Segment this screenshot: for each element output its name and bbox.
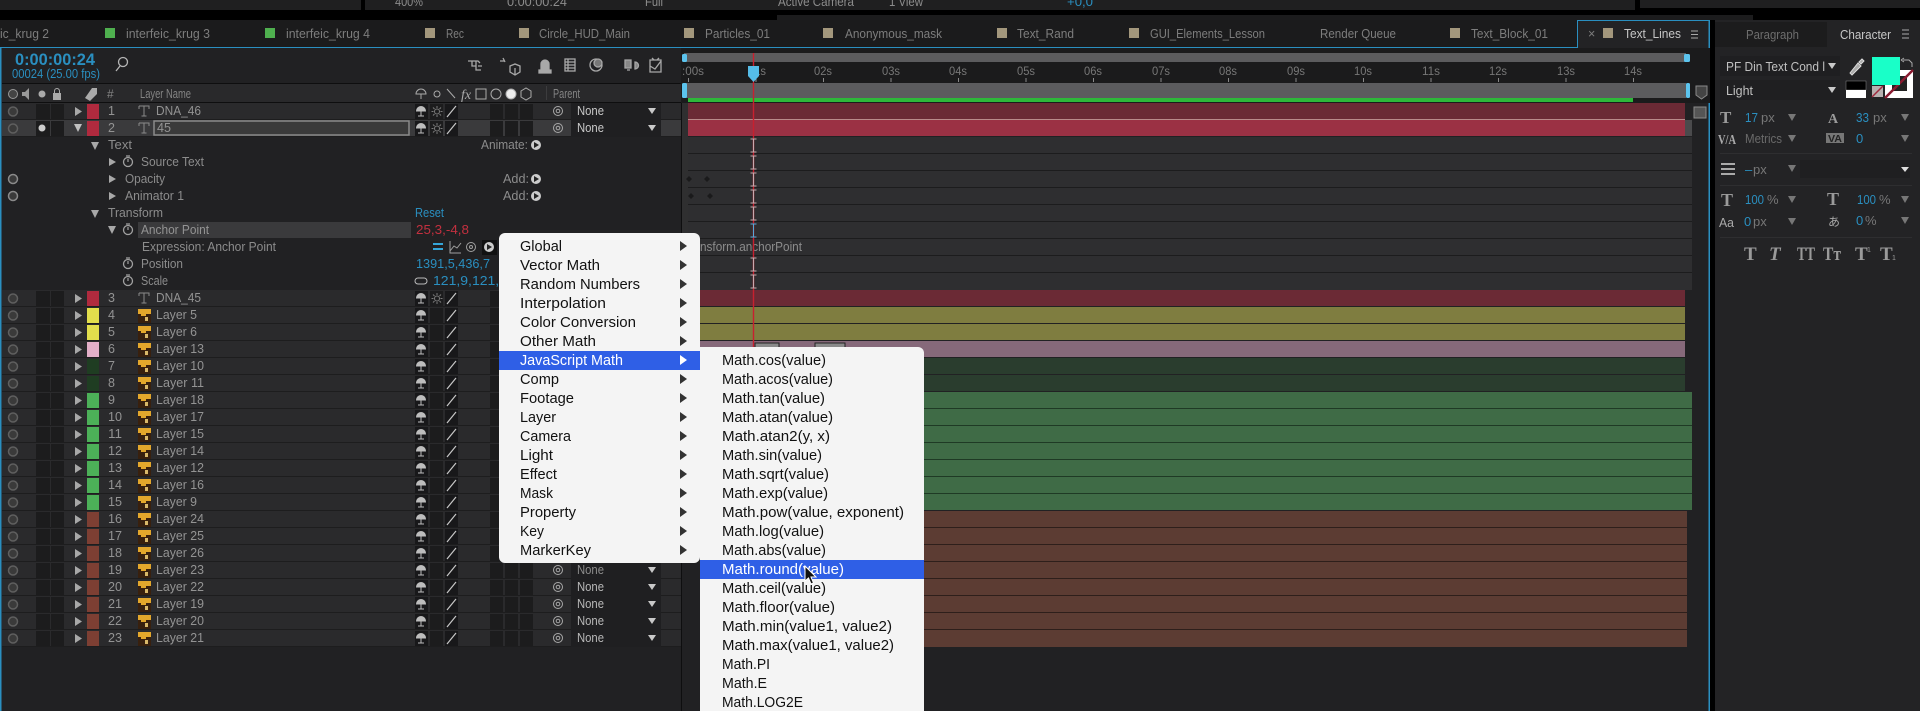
composition tab bar: Anonymous_mask [845, 27, 943, 41]
baseline and tsume row [1719, 213, 1909, 230]
layer row 10: Layer 17 [156, 410, 204, 424]
scale row: T [1721, 190, 1733, 210]
layer row 3: DNA_45: 3 [108, 291, 115, 305]
Text group row: Animate: [481, 138, 528, 152]
scale row: 100 [1857, 192, 1876, 207]
layer row 20: Layer 22 [156, 580, 204, 594]
layer row 18: Layer 26 [156, 546, 204, 560]
layer row 5: 5 [108, 325, 115, 339]
layer row 21: None [577, 597, 604, 611]
kerning and tracking row: 0 [1856, 131, 1863, 146]
time ruler and work area: 12s [1489, 64, 1507, 78]
text style buttons: T [1880, 244, 1893, 265]
JavaScript Math submenu: Math.cos(value) [722, 352, 826, 369]
text style buttons: T [1855, 244, 1868, 265]
layer row 21: Layer 19 [156, 597, 204, 611]
layer row 7 [8, 358, 661, 375]
layer rows background [2, 103, 681, 647]
layer row 15: 15 [108, 495, 122, 509]
Animator 1 row: Add: [503, 189, 529, 203]
layer row 20: None [577, 580, 604, 594]
icon: search [116, 58, 128, 71]
layer row 4: 4 [108, 308, 115, 322]
layer row 18 [8, 545, 661, 562]
top viewer toolbar strip [0, 0, 1920, 20]
layer row 15: Layer 9 [156, 495, 197, 509]
layer row 2: 45 (selected): 2 [108, 121, 115, 135]
icon: eyedropper [1850, 59, 1864, 75]
text style buttons: TT [1797, 244, 1815, 265]
layer row 12: 12 [108, 444, 122, 458]
kerning and tracking row: Metrics [1745, 132, 1782, 146]
layer row 12: Layer 14 [156, 444, 204, 458]
layer row 16 [8, 511, 661, 528]
JavaScript Math submenu: Math.atan2(y, x) [722, 428, 830, 445]
layer row 23: None [577, 631, 604, 645]
layer row 22: 22 [108, 614, 122, 628]
expression language menu: Key [520, 523, 544, 540]
expanded properties of layer 2 [8, 138, 541, 288]
time ruler and work area: 05s [1017, 64, 1035, 78]
current time indicator [748, 53, 759, 360]
layer row 6: 6 [108, 342, 115, 356]
layer row 23 [8, 630, 661, 647]
expression language menu: Random Numbers [520, 276, 640, 293]
time ruler and work area: 06s [1084, 64, 1102, 78]
layer row 8: Layer 11 [156, 376, 204, 390]
scale row: 100 [1745, 192, 1764, 207]
text style buttons: T [1744, 244, 1757, 265]
Animator 1 row [8, 189, 541, 203]
layer row 16: 16 [108, 512, 122, 526]
time ruler and work area: 09s [1287, 64, 1305, 78]
Expression row [142, 240, 497, 255]
expression language menu: Mask [520, 485, 553, 502]
highlighted menu item: JavaScript Math [499, 351, 700, 370]
layer row 1: DNA_46 [8, 103, 661, 120]
scale row: % [1879, 192, 1891, 207]
Source Text row: Source Text [141, 155, 205, 169]
expression language menu: Color Conversion [520, 314, 636, 331]
time ruler and work area: 08s [1219, 64, 1237, 78]
baseline and tsume row: 0 [1744, 214, 1751, 229]
timecode display: 0:00:00:24 [15, 50, 96, 69]
JavaScript Math submenu: Math.E [722, 675, 767, 692]
expression language menu: Footage [520, 390, 574, 407]
Position row: 1391,5,436,7 [416, 257, 490, 271]
layer column headers: Layer Name [140, 86, 191, 101]
composition tab bar: Rec [446, 27, 464, 41]
text style buttons: T [1769, 244, 1782, 265]
layer row 22 [8, 613, 661, 630]
Position row: Position [141, 257, 183, 271]
layer row 17: Layer 25 [156, 529, 204, 543]
Transform row: Reset [415, 206, 444, 220]
JavaScript Math submenu: Math.LOG2E [722, 694, 803, 711]
text style buttons: 1 [1867, 247, 1871, 254]
time ruler and work area: 04s [949, 64, 967, 78]
text style buttons: 1 [1892, 255, 1896, 262]
layer row 19 [8, 562, 661, 579]
text style buttons [1744, 244, 1896, 265]
composition tab bar: Circle_HUD_Main [539, 27, 630, 41]
layer row 14 [8, 477, 661, 494]
layer row 15 [8, 494, 661, 511]
layer row 9 [8, 392, 661, 409]
expression language menu: Light [520, 447, 554, 464]
expression language menu: Interpolation [520, 295, 606, 312]
layer row 1: DNA_46: DNA_46 [156, 104, 201, 118]
active tab: Text_Lines: × [1588, 27, 1595, 41]
font size and leading row: T [1720, 108, 1732, 127]
layer row 17 [8, 528, 661, 545]
panel tabs [1746, 27, 1909, 42]
font size and leading row: 33 [1856, 110, 1869, 125]
Source Text row [109, 155, 205, 169]
Scale row [124, 274, 507, 288]
expression language menu: JavaScript Math [520, 352, 623, 369]
layer row 6 [8, 341, 661, 358]
Anchor Point row [108, 223, 469, 237]
font size and leading row: A [1828, 112, 1839, 127]
composition tab bar: GUI_Elements_Lesson [1150, 27, 1265, 41]
Transform row: Transform [108, 206, 163, 220]
time ruler and work area: 01s [748, 64, 766, 78]
layer row 23: 23 [108, 631, 122, 645]
time ruler and work area: 10s [1354, 64, 1372, 78]
Scale row: Scale [141, 274, 168, 288]
Expression row: Expression: Anchor Point [142, 240, 276, 254]
expression language menu: Comp [520, 371, 559, 388]
composition tab bar: interfeic_krug 3 [126, 27, 210, 41]
JavaScript Math submenu: Math.max(value1, value2) [722, 637, 894, 654]
Opacity row: Opacity [125, 172, 166, 186]
layer row 4 [8, 307, 661, 324]
layer row 11: Layer 15 [156, 427, 204, 441]
Anchor Point row: Anchor Point [141, 223, 209, 237]
expression language menu: Camera [520, 428, 572, 445]
font family and style [1720, 56, 1840, 100]
JavaScript Math submenu: Math.exp(value) [722, 485, 828, 502]
font size and leading row [1720, 108, 1909, 127]
time ruler and work area: 14s [1624, 64, 1642, 78]
active tab: Text_Lines: Text_Lines [1624, 27, 1681, 41]
expression language menu: Effect [520, 466, 558, 483]
JavaScript Math submenu: Math.tan(value) [722, 390, 825, 407]
layer row 9: Layer 18 [156, 393, 204, 407]
layer row 3: DNA_45: DNA_45 [156, 291, 201, 305]
baseline and tsume row: % [1865, 213, 1877, 228]
baseline and tsume row: px [1753, 214, 1767, 229]
layer row 7: 7 [108, 359, 115, 373]
font size and leading row: px [1761, 110, 1775, 125]
timecode display [12, 50, 100, 81]
layer row 10: 10 [108, 410, 122, 424]
JavaScript Math submenu: Math.atan(value) [722, 409, 833, 426]
layer row 21: 21 [108, 597, 122, 611]
layer row 7: Layer 10 [156, 359, 204, 373]
Position row [124, 257, 490, 271]
JavaScript Math submenu: Math.round(value) [722, 561, 844, 578]
panel tabs: Paragraph [1746, 27, 1799, 42]
layer row 20 [8, 579, 661, 596]
time ruler and work area: 02s [814, 64, 832, 78]
line weight row [1721, 160, 1910, 178]
layer row 8: 8 [108, 376, 115, 390]
layer row 5 [8, 324, 661, 341]
timeline toolbar icons [468, 58, 661, 75]
time ruler and work area: 07s [1152, 64, 1170, 78]
composition tab bar: Render Queue [1320, 27, 1396, 41]
JavaScript Math submenu: Math.sqrt(value) [722, 466, 829, 483]
baseline and tsume row: 0 [1856, 213, 1863, 228]
layer row 14: 14 [108, 478, 122, 492]
scale row: % [1767, 192, 1779, 207]
expression language menu: Other Math [520, 333, 596, 350]
layer row 19: 19 [108, 563, 122, 577]
layer column headers: # [107, 87, 114, 101]
line weight row: px [1753, 162, 1767, 177]
font size and leading row: 17 [1745, 110, 1758, 125]
JavaScript Math submenu: Math.PI [722, 656, 770, 673]
layer row 11: 11 [108, 427, 122, 441]
layer column headers: Parent [553, 86, 580, 101]
colour swatches [1846, 57, 1913, 98]
JavaScript Math submenu: Math.acos(value) [722, 371, 833, 388]
layer row 10 [8, 409, 661, 426]
JavaScript Math submenu: Math.min(value1, value2) [722, 618, 892, 635]
layer row 3: DNA_45 [8, 290, 661, 307]
layer row 5: Layer 6 [156, 325, 197, 339]
scale row [1721, 189, 1909, 210]
line weight row: – [1745, 162, 1753, 177]
Animator 1 row: Animator 1 [125, 189, 184, 203]
expression language menu: MarkerKey [520, 542, 591, 559]
JavaScript Math submenu: Math.ceil(value) [722, 580, 826, 597]
JavaScript Math submenu: Math.log(value) [722, 523, 824, 540]
scale row: T [1827, 189, 1839, 209]
kerning and tracking row: V/A [1718, 133, 1737, 148]
composition tab bar: Text_Rand [1017, 27, 1074, 41]
highlighted submenu item: Math.round [700, 560, 924, 579]
expression language menu: Layer [520, 409, 556, 426]
composition tab bar: ic_krug 2 [0, 27, 49, 41]
layer row 4: Layer 5 [156, 308, 197, 322]
layer row 6: Layer 13 [156, 342, 204, 356]
time ruler and work area: 13s [1557, 64, 1575, 78]
layer row 1: DNA_46: None [577, 104, 604, 118]
layer row 9: 9 [108, 393, 115, 407]
JavaScript Math submenu: Math.sin(value) [722, 447, 822, 464]
JavaScript Math submenu: Math.floor(value) [722, 599, 835, 616]
layer row 14: Layer 16 [156, 478, 204, 492]
character panel [1715, 20, 1920, 711]
font size and leading row: px [1873, 110, 1887, 125]
text style buttons: Tᴛ [1823, 244, 1842, 265]
layer row 16: Layer 24 [156, 512, 204, 526]
layer row 20: 20 [108, 580, 122, 594]
composition tab bar [0, 20, 1710, 50]
JavaScript Math submenu: Math.abs(value) [722, 542, 826, 559]
layer row 17: 17 [108, 529, 122, 543]
icon: mouse cursor [805, 566, 816, 584]
layer row 13 [8, 460, 661, 477]
baseline and tsume row: Aa [1719, 215, 1735, 230]
Scale row: 121,9,121,9 [433, 274, 507, 288]
panel tabs: Character [1840, 27, 1892, 42]
layer row 1: DNA_46: 1 [108, 104, 115, 118]
layer row 12 [8, 443, 661, 460]
layer row 2: 45 (selected): None [577, 121, 604, 135]
layer row 2: 45 (selected) [8, 120, 661, 137]
Text group row: Text [108, 138, 133, 152]
timecode display: 00024 (25.00 fps) [12, 67, 100, 81]
layer row 13: Layer 12 [156, 461, 204, 475]
time ruler and work area: :00s [682, 64, 704, 78]
Transform row [91, 206, 444, 220]
JavaScript Math submenu [700, 347, 924, 711]
baseline and tsume row: あ [1828, 215, 1840, 229]
layer row 18: 18 [108, 546, 122, 560]
time ruler and work area: 11s [1422, 64, 1440, 78]
composition tab bar: Particles_01 [705, 27, 770, 41]
JavaScript Math submenu: Math.pow(value, exponent) [722, 504, 904, 521]
timeline layer bars [681, 103, 1692, 711]
kerning and tracking row: VA [1828, 134, 1842, 145]
time ruler and work area [681, 48, 1710, 103]
layer row 22: Layer 20 [156, 614, 204, 628]
Opacity row: Add: [503, 172, 529, 186]
font family and style: PF Din Text Cond l [1726, 59, 1825, 74]
composition tab bar: interfeic_krug 4 [286, 27, 370, 41]
time ruler and work area: 03s [882, 64, 900, 78]
layer row 2: 45 (selected): 45 [157, 121, 171, 135]
Text group row [91, 138, 541, 152]
kerning and tracking row [1718, 131, 1909, 148]
layer row 23: Layer 21 [156, 631, 204, 645]
Opacity row [8, 172, 541, 186]
timeline layer bars: nsform.anchorPoint [700, 240, 802, 254]
font family and style: Light [1726, 83, 1753, 98]
expression language menu: Property [520, 504, 576, 521]
layer row 21 [8, 596, 661, 613]
layer column headers: fx [461, 88, 472, 103]
layer row 22: None [577, 614, 604, 628]
expression language menu [499, 233, 700, 563]
layer row 11 [8, 426, 661, 443]
timeline right edge icons [1694, 86, 1707, 118]
Anchor Point row: 25,3,-4,8 [416, 223, 469, 237]
composition tab bar: Text_Block_01 [1471, 27, 1548, 41]
layer row 8 [8, 375, 661, 392]
active tab: Text_Lines [0, 20, 1710, 50]
layer column headers [2, 83, 681, 103]
layer row 13: 13 [108, 461, 122, 475]
expression language menu: Global [520, 238, 562, 255]
layer row 19: Layer 23 [156, 563, 204, 577]
expression language menu: Vector Math [520, 257, 600, 274]
layer row 19: None [577, 563, 604, 577]
